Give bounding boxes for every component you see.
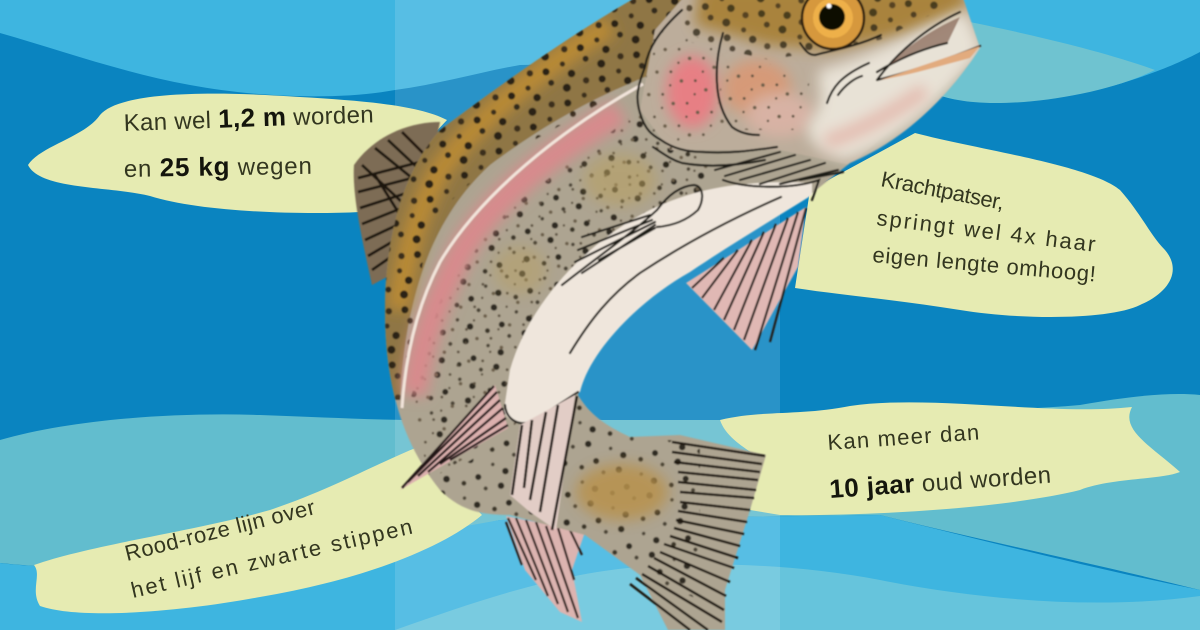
callout: bottom-right blob: 10 jaar oud worden <box>828 459 1052 504</box>
tail rays <box>630 442 765 630</box>
ventral fin left <box>400 385 508 490</box>
panel: lighter centre column <box>395 0 780 630</box>
callout: bottom-right blob <box>720 402 1180 515</box>
body <box>380 0 985 630</box>
callout: top-left blob <box>28 94 447 213</box>
head top gold <box>695 0 965 50</box>
lateral white line <box>402 84 643 408</box>
illustration: rainbow trout <box>354 0 985 630</box>
callout: right blob: Krachtpatser, <box>879 166 1007 215</box>
callout: bottom-left blob: het lijf en zwarte stippen <box>129 514 415 603</box>
ventral fin centre <box>510 395 575 530</box>
lateral pink stripe <box>414 112 620 395</box>
head base <box>640 0 985 165</box>
gill plate pink <box>666 56 718 128</box>
line art: belly, gill and mouth <box>505 10 980 423</box>
dorsal fin <box>354 122 440 285</box>
mouth interior <box>890 17 960 65</box>
callout: bottom-left blob <box>34 447 482 613</box>
tail gold patch <box>576 464 668 520</box>
callout: top-left blob: en 25 kg wegen <box>124 150 312 183</box>
callout: bottom-left blob: Rood-roze lijn over <box>122 494 317 566</box>
callout: right blob: eigen lengte omhoog! <box>872 242 1097 287</box>
callout: bottom-right blob: Kan meer dan <box>827 419 980 455</box>
white jaw <box>808 10 982 160</box>
anal fin <box>506 516 585 622</box>
belly <box>504 182 812 423</box>
pectoral fin <box>686 207 806 350</box>
spotted flank <box>410 120 705 492</box>
callout: right blob <box>795 133 1173 317</box>
eye <box>802 0 864 49</box>
callout: top-left blob: Kan wel 1,2 m worden <box>123 98 374 137</box>
back colouring <box>382 0 690 400</box>
callout: right blob: springt wel 4x haar <box>875 205 1097 257</box>
